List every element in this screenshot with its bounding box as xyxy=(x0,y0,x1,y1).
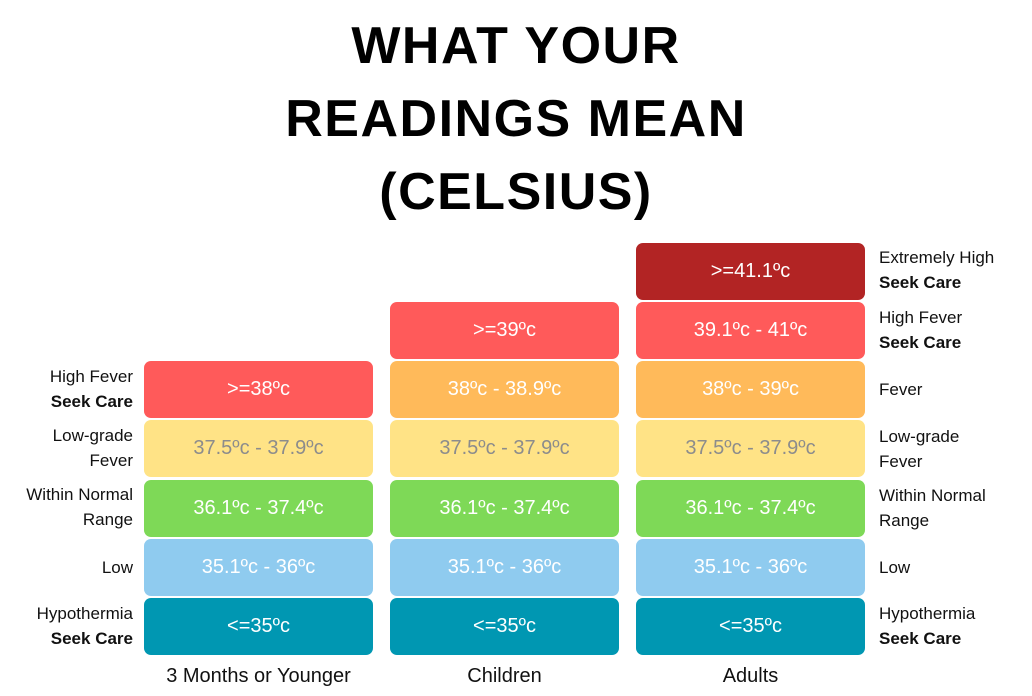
title: (CELSIUS) xyxy=(379,163,653,221)
left labels: Hypothermia xyxy=(37,604,133,623)
column: adults: 39.1ºc - 41ºc xyxy=(694,319,807,341)
left labels: Range xyxy=(83,510,133,529)
right labels: Fever xyxy=(879,452,922,471)
left labels: Seek Care xyxy=(51,629,133,648)
column: adults: 38ºc - 39ºc xyxy=(702,378,799,400)
left labels: High Fever xyxy=(50,367,133,386)
title: READINGS MEAN xyxy=(285,90,747,148)
column captions: Adults xyxy=(723,665,778,687)
left labels xyxy=(26,367,133,648)
column: 3 months or younger: 37.5ºc - 37.9ºc xyxy=(193,437,324,459)
title xyxy=(285,17,747,221)
column: children: 36.1ºc - 37.4ºc xyxy=(439,497,570,519)
right labels: Within Normal xyxy=(879,486,986,505)
column: children: >=39ºc xyxy=(473,319,536,341)
column: children: 38ºc - 38.9ºc xyxy=(448,378,561,400)
column: adults: <=35ºc xyxy=(719,615,782,637)
column: adults xyxy=(636,243,865,655)
right labels: Hypothermia xyxy=(879,604,975,623)
column: 3 months or younger: 36.1ºc - 37.4ºc xyxy=(193,497,324,519)
right labels: Seek Care xyxy=(879,629,961,648)
right labels: Seek Care xyxy=(879,273,961,292)
column: 3 months or younger: >=38ºc xyxy=(227,378,290,400)
left labels: Fever xyxy=(90,451,133,470)
right labels: Seek Care xyxy=(879,333,961,352)
column: adults: 35.1ºc - 36ºc xyxy=(694,556,807,578)
column: adults: >=41.1ºc xyxy=(711,260,790,282)
column captions xyxy=(166,665,778,687)
right labels: Low-grade xyxy=(879,427,959,446)
column: 3 months or younger: 35.1ºc - 36ºc xyxy=(202,556,315,578)
column: 3 months or younger: <=35ºc xyxy=(227,615,290,637)
column: adults: 37.5ºc - 37.9ºc xyxy=(685,437,816,459)
column: children: <=35ºc xyxy=(473,615,536,637)
column: children: 35.1ºc - 36ºc xyxy=(448,556,561,578)
column: children xyxy=(390,302,619,655)
right labels: Fever xyxy=(879,380,922,399)
right labels: Range xyxy=(879,511,929,530)
right labels: High Fever xyxy=(879,308,962,327)
left labels: Within Normal xyxy=(26,485,133,504)
right labels: Low xyxy=(879,558,910,577)
right labels: Extremely High xyxy=(879,248,994,267)
column captions: Children xyxy=(467,665,542,687)
right labels xyxy=(879,248,994,648)
left labels: Low-grade xyxy=(53,426,133,445)
column: adults: 36.1ºc - 37.4ºc xyxy=(685,497,816,519)
title: WHAT YOUR xyxy=(351,17,681,75)
left labels: Low xyxy=(102,558,133,577)
left labels: Seek Care xyxy=(51,392,133,411)
column: children: 37.5ºc - 37.9ºc xyxy=(439,437,570,459)
column captions: 3 Months or Younger xyxy=(166,665,351,687)
column: 3 months or younger xyxy=(144,361,373,655)
